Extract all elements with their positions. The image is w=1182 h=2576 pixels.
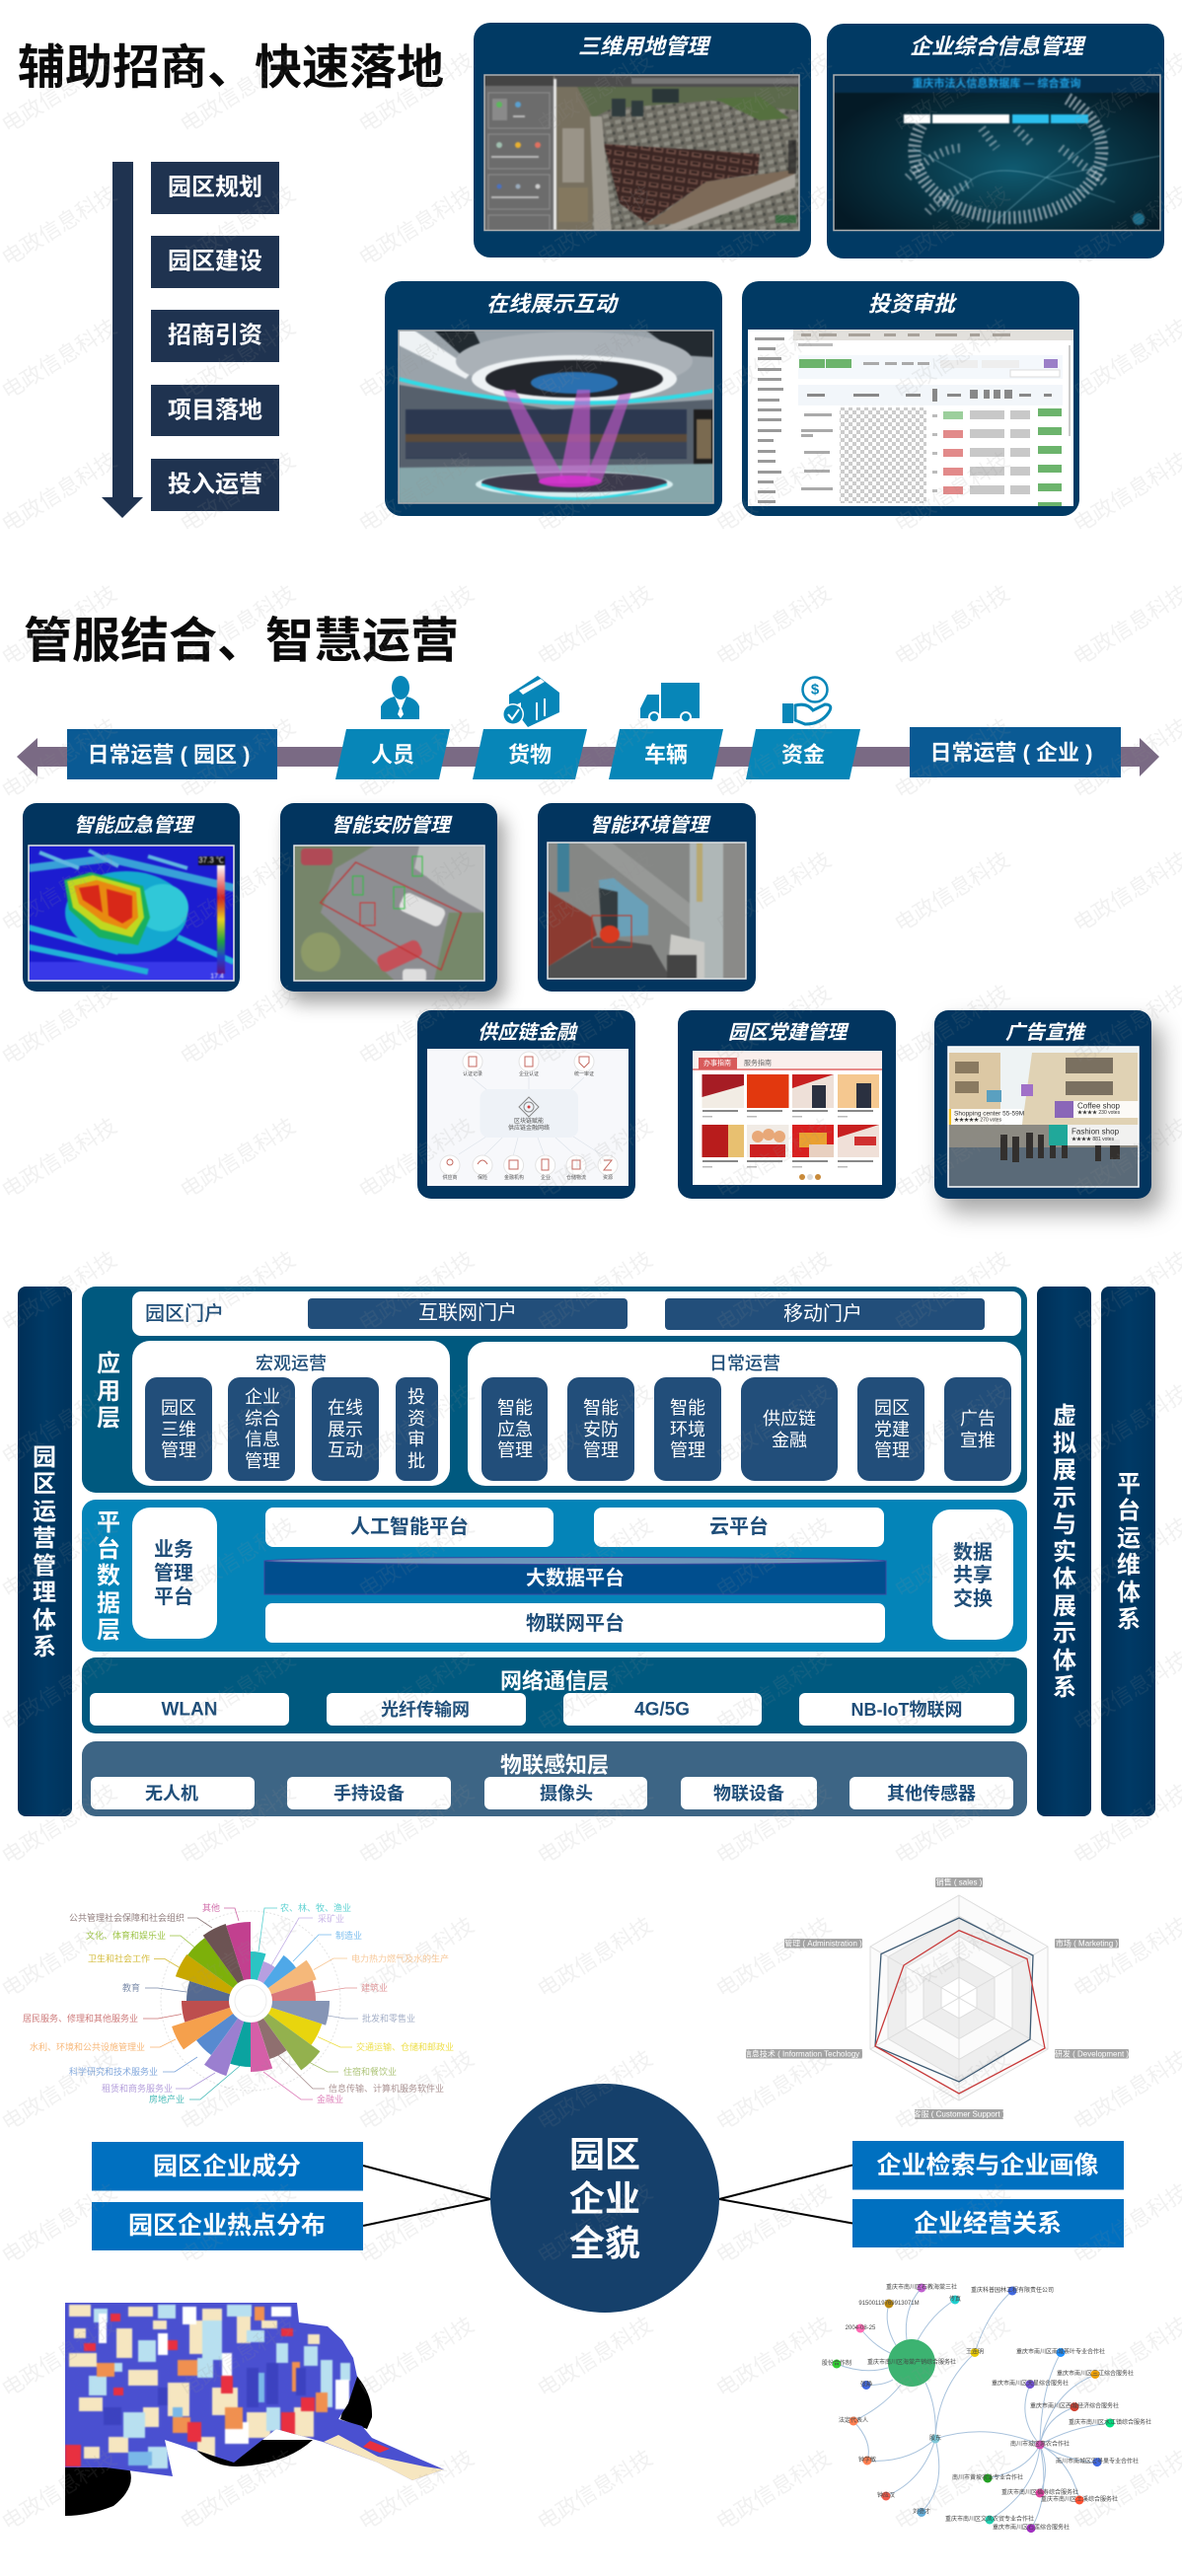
module: 智能环境管理: [654, 1377, 721, 1481]
graph labels: 91500119769913071M: [858, 2301, 920, 2307]
card title: 供应链金融: [478, 1021, 578, 1044]
screenshot: 3D land map: [484, 75, 799, 235]
module: 智能应急管理: [481, 1377, 548, 1481]
box: 物联设备: 物联设备: [713, 1784, 784, 1803]
graph labels: 重庆市南川区海棠产销综合服务社: [867, 2358, 956, 2366]
card title: 在线展示互动: [486, 292, 620, 316]
graph labels: 王连明: [966, 2348, 984, 2356]
box: 光纤传输网: 光纤传输网: [381, 1699, 470, 1720]
label: 园区企业热点分布: 园区企业热点分布: [128, 2212, 326, 2240]
graph labels: 南川市南城区宏寻果专业合作社: [1056, 2458, 1139, 2466]
chart labels: 金融业: [317, 2094, 343, 2104]
panel: 供应链金融: [417, 1010, 635, 1199]
module: 园区三维管理: [145, 1377, 212, 1481]
chart labels: 租赁和商务服务业: [102, 2083, 173, 2094]
module: 园区党建管理: 管理: [874, 1440, 910, 1460]
card title: 广告宣推: [1005, 1021, 1087, 1044]
panel: 园区运营管理体系: 理: [33, 1579, 56, 1606]
step: 招商引资: [151, 310, 279, 362]
chart labels: 文化、体育和娱乐业: [86, 1930, 166, 1941]
image: party building portal: 办事指南: [703, 1058, 731, 1067]
graph labels: 2004-08-25: [846, 2325, 876, 2331]
layer title: 网络通信层: [500, 1669, 609, 1693]
chart labels: 建筑业: [361, 1982, 388, 1993]
chart: enterprise relationship graph: [822, 2283, 1151, 2533]
tag: 货物: 货物: [508, 742, 552, 768]
box: 4G/5G: [563, 1693, 762, 1726]
icon: person: [381, 676, 419, 719]
module: 园区三维管理: 三维: [161, 1420, 196, 1439]
center circle: 园区企业全貌: 全貌: [569, 2222, 640, 2263]
button: 移动门户: [665, 1298, 985, 1330]
panel: 投资审批: [742, 281, 1079, 516]
image: party building portal: [693, 1051, 882, 1185]
image: thermal camera: 37.3 ℃: [198, 856, 224, 864]
block: 业务管理平台: 平台: [154, 1584, 193, 1608]
box: 摄像头: 摄像头: [540, 1783, 593, 1803]
block: 业务管理平台: [132, 1508, 217, 1639]
module: 投资审批: 审: [407, 1430, 425, 1449]
group: 日常运营: 日常运营: [709, 1354, 780, 1373]
panel: 网络通信层: [82, 1657, 1027, 1733]
graph labels: 张静: [860, 2380, 872, 2388]
box: WLAN: WLAN: [162, 1699, 217, 1721]
panel: 园区运营管理体系: 系: [33, 1634, 56, 1659]
center circle: 园区企业全貌: 企业: [569, 2178, 640, 2218]
box: NB-IoT物联网: [799, 1693, 1014, 1726]
graph labels: 重庆市南川区土溪综合服务社: [1041, 2495, 1118, 2503]
module: 在线展示互动: 互动: [328, 1440, 363, 1460]
module: 智能安防管理: [567, 1377, 634, 1481]
chart labels: 农、林、牧、渔业: [280, 1902, 351, 1913]
image: supply chain diagram: 企业认证: [519, 1070, 539, 1077]
image: AR street advertising: Fashion shop: [1071, 1127, 1120, 1137]
group: 宏观运营: [132, 1341, 450, 1486]
graph labels: 重庆市南川区南城茶叶专业合作社: [1016, 2348, 1105, 2356]
graph labels: 传真: [949, 2295, 961, 2303]
graph labels: 重庆市南川区西城经济综合服务社: [1030, 2402, 1119, 2410]
tag: 人员: 人员: [371, 742, 414, 768]
layer label: 台: [97, 1535, 120, 1563]
graph labels: 南川市城区惠农合作社: [1010, 2440, 1070, 2448]
module: 智能安防管理: 安防: [583, 1420, 619, 1439]
box: WLAN: [90, 1693, 289, 1726]
block: 大数据平台: 大数据平台: [526, 1566, 625, 1589]
panel: 平台运维体系: 系: [1117, 1606, 1141, 1632]
module: 投资审批: 批: [407, 1451, 425, 1471]
screenshot: approval table: [748, 330, 1073, 506]
layer label: 平: [97, 1509, 120, 1535]
module: 智能应急管理: 管理: [497, 1440, 533, 1460]
box: 光纤传输网: [327, 1693, 526, 1726]
image: supply chain diagram: 仓储物流: [566, 1174, 586, 1181]
panel: 虚拟展示与实体展示体系: 展: [1053, 1456, 1076, 1484]
block: 数据共享交换: 数据: [953, 1541, 993, 1564]
panel: 虚拟展示与实体展示体系: 示: [1053, 1484, 1076, 1511]
module: 企业综合信息管理: 管理: [245, 1451, 280, 1471]
step: 园区建设: 园区建设: [168, 249, 262, 274]
card title: 投资审批: [868, 292, 958, 316]
button: 移动门户: 移动门户: [783, 1302, 862, 1325]
graph labels: 刘德才: [913, 2508, 930, 2516]
module: 在线展示互动: 展示: [328, 1420, 363, 1439]
chart labels: 采矿业: [318, 1913, 344, 1924]
title: 管服结合、智慧运营: 管服结合、智慧运营: [24, 615, 459, 668]
panel: 虚拟展示与实体展示体系: 系: [1053, 1673, 1076, 1701]
module: 投资审批: 资: [407, 1409, 425, 1429]
tag: 人员: [335, 729, 450, 779]
image: AR street advertising: Shopping center 55-59M: [954, 1111, 1024, 1117]
tag: 货物: [473, 729, 587, 779]
module: 智能安防管理: 管理: [583, 1440, 619, 1460]
panel: 园区运营管理体系: 运: [33, 1498, 56, 1525]
title: 辅助招商、快速落地: 辅助招商、快速落地: [18, 41, 444, 95]
graph labels: [822, 2283, 1151, 2532]
block: 数据共享交换: [932, 1509, 1013, 1640]
module: 广告宣推: 广告: [960, 1409, 996, 1429]
panel: 智能安防管理: [280, 803, 497, 992]
block: 云平台: 云平台: [709, 1514, 769, 1538]
radar label: 管理: 管理 ( Administration ): [784, 1938, 862, 1948]
label: 日常运营（企业）: [910, 727, 1121, 777]
panel: 园区运营管理体系: 体: [33, 1606, 56, 1634]
graph labels: 重庆市南川区石教海棠三社: [886, 2283, 957, 2291]
image: supply chain diagram: 保险: [478, 1174, 487, 1181]
tag: 资金: [746, 729, 860, 779]
block: 业务管理平台: 管理: [154, 1562, 193, 1584]
layer label: 层: [97, 1616, 120, 1644]
icon: cargo box: [502, 676, 559, 727]
image: supply chain diagram: 供应商: [442, 1174, 458, 1181]
image: supply chain diagram: 认证记录: [463, 1070, 482, 1077]
module: 智能应急管理: 应急: [497, 1420, 533, 1439]
module: 供应链金融: 供应链: [763, 1409, 816, 1429]
graph labels: 重庆市南川区天星综合服务社: [992, 2380, 1069, 2388]
radar label: 研发: 研发 ( Development ): [1055, 2048, 1129, 2058]
panel: 园区运营管理体系: 营: [33, 1525, 56, 1551]
portal row: [132, 1291, 1021, 1336]
graph labels: 重庆市南川区水江镇综合服务社: [1069, 2418, 1151, 2426]
layer label: 应: [97, 1350, 120, 1377]
image: thermal camera: 17.4: [210, 973, 224, 981]
step: 投入运营: [151, 459, 279, 511]
panel: 平台运维体系: 台: [1117, 1496, 1141, 1523]
chart: radar: [744, 1877, 1129, 2119]
panel: 虚拟展示与实体展示体系: 示: [1053, 1620, 1076, 1646]
panel: 虚拟展示与实体展示体系: 实: [1053, 1539, 1076, 1565]
chart: industry rose chart: [23, 1902, 454, 2104]
panel: 物联感知层: [82, 1741, 1027, 1816]
panel: 三维用地管理: [474, 23, 811, 258]
image: security camera: [294, 846, 484, 983]
panel: 企业综合信息管理: [827, 24, 1164, 258]
block: 人工智能平台: [265, 1508, 554, 1547]
label: 日常运营（园区）: [67, 729, 277, 779]
block: 云平台: [594, 1508, 884, 1547]
label: 园区企业成分: 园区企业成分: [153, 2153, 301, 2180]
step: 项目落地: 项目落地: [168, 397, 262, 424]
block: 物联网平台: 物联网平台: [526, 1611, 625, 1635]
panel: 虚拟展示与实体展示体系: 虚: [1053, 1403, 1076, 1429]
block: 数据共享交换: 共享: [953, 1564, 993, 1586]
screenshot: enterprise database: 重庆市法人信息数据库 — 综合查询: [912, 76, 1081, 90]
panel: 应用层: [82, 1287, 1027, 1493]
step: 投入运营: 投入运营: [168, 472, 262, 497]
radar label: 信息技术: 信息技术 ( Information Techology ): [744, 2048, 864, 2058]
box: 无人机: 无人机: [145, 1784, 198, 1803]
step: 项目落地: [151, 385, 279, 436]
module: 智能环境管理: 管理: [670, 1440, 705, 1460]
label: 日常运营（园区）: 日常运营 ( 园区 ): [87, 742, 251, 768]
module: 园区三维管理: 管理: [161, 1440, 196, 1460]
layer label: 层: [97, 1405, 120, 1431]
button: 互联网门户: 互联网门户: [418, 1301, 517, 1324]
step: 园区规划: [151, 162, 279, 214]
portal row: 园区门户: [145, 1302, 224, 1325]
module: 园区党建管理: 园区: [874, 1398, 910, 1418]
module: 广告宣推: 宣推: [960, 1431, 996, 1450]
module: 园区三维管理: 园区: [161, 1398, 196, 1418]
module: 企业综合信息管理: 企业: [245, 1387, 280, 1407]
graph labels: 法定代表人: [839, 2416, 868, 2424]
box: 摄像头: [484, 1777, 647, 1809]
chart labels: 其他: [202, 1902, 220, 1913]
chart labels: 交通运输、仓储和邮政业: [356, 2041, 454, 2052]
panel: 虚拟展示与实体展示体系: [1037, 1287, 1091, 1816]
panel: 平台运维体系: 平: [1117, 1470, 1141, 1498]
module: 投资审批: [396, 1377, 438, 1481]
panel: 虚拟展示与实体展示体系: 体: [1053, 1565, 1076, 1592]
panel: 智能应急管理: [23, 803, 240, 992]
chart labels: [23, 1902, 454, 2104]
image: AR street advertising: ★★★★ 881 votes: [1071, 1137, 1115, 1142]
module: 智能环境管理: 环境: [670, 1420, 705, 1439]
panel: 智能环境管理: [538, 803, 756, 992]
panel: 园区党建管理: [678, 1010, 896, 1199]
chart labels: 教育: [122, 1982, 140, 1993]
panel: 虚拟展示与实体展示体系: 与: [1053, 1511, 1076, 1537]
step list: [151, 162, 279, 511]
connector lines: [363, 2165, 852, 2226]
tag: 车辆: 车辆: [644, 742, 688, 768]
image: supply chain diagram: 统一审证: [574, 1070, 594, 1077]
chart labels: 居民服务、修理和其他服务业: [23, 2013, 138, 2024]
screenshot: enterprise database: [834, 75, 1160, 231]
label: 企业检索与企业画像: [852, 2141, 1124, 2190]
module: 供应链金融: [741, 1377, 838, 1481]
chart labels: 公共管理社会保障和社会组织: [69, 1912, 185, 1923]
panel: 园区运营管理体系: 园: [33, 1444, 56, 1470]
radar label: 客服: 客服 ( Customer Support ): [914, 2109, 1005, 2119]
panel: 平台运维体系: 体: [1117, 1579, 1141, 1606]
graph labels: 股东: [929, 2434, 941, 2442]
graph labels: 重庆科普园林工程有限责任公司: [971, 2286, 1054, 2294]
tag: 资金: 资金: [781, 742, 825, 768]
center circle: 园区企业全貌: 园区: [569, 2133, 640, 2174]
step: 园区建设: [151, 236, 279, 288]
graph labels: 股份合作制: [822, 2359, 851, 2367]
panel: 广告宣推: [934, 1010, 1151, 1199]
panel: 在线展示互动: [385, 281, 722, 516]
block: 物联网平台: [265, 1603, 885, 1643]
card title: 企业综合信息管理: [910, 34, 1086, 59]
label: 企业经营关系: [852, 2199, 1124, 2247]
panel: 园区运营管理体系: 管: [33, 1553, 56, 1579]
label: 园区企业成分: [92, 2142, 363, 2190]
image: supply chain diagram: 资源: [603, 1174, 613, 1181]
block: 业务管理平台: 业务: [154, 1538, 193, 1561]
module: 园区党建管理: 党建: [874, 1420, 910, 1439]
graph labels: 钟应汉: [877, 2491, 895, 2499]
arrow: process flow: [102, 162, 143, 518]
panel: 园区运营管理体系: 区: [33, 1470, 56, 1498]
tag: 车辆: [609, 729, 723, 779]
image: AR street advertising: ★★★★ 230 votes: [1077, 1110, 1121, 1116]
chart labels: 科学研究和技术服务业: [69, 2066, 158, 2077]
box: 4G/5G: 4G/5G: [634, 1699, 690, 1721]
graph labels: 重庆市南川区石莲综合服务社: [993, 2524, 1070, 2532]
module: 供应链金融: 金融: [772, 1431, 807, 1450]
chart labels: 制造业: [335, 1930, 362, 1941]
card title: 园区党建管理: [728, 1021, 850, 1044]
module: 在线展示互动: [312, 1377, 379, 1481]
image: AR street advertising: ★★★★★ 270 votes: [954, 1117, 1002, 1123]
graph labels: 重庆市南川区文凤农贸专业合作社: [945, 2515, 1034, 2523]
screenshot: virtual studio: [399, 331, 713, 503]
map: enterprise hotspot 3D heat map: [65, 2303, 444, 2516]
module: 企业综合信息管理: [228, 1377, 295, 1481]
graph labels: 重庆市南川区福寿综合服务社: [1001, 2488, 1078, 2496]
panel: 平台数据层: [82, 1500, 1027, 1652]
layer label: 据: [97, 1590, 120, 1616]
chart labels: 水利、环境和公共设施管理业: [30, 2041, 145, 2052]
group: 宏观运营: 宏观运营: [256, 1354, 327, 1373]
layer label: 数: [97, 1563, 120, 1588]
box: 手持设备: 手持设备: [333, 1784, 405, 1803]
chart labels: 住宿和餐饮业: [343, 2066, 397, 2077]
panel: 平台运维体系: [1101, 1287, 1155, 1816]
graph labels: 重庆市南川区三江综合服务社: [1057, 2370, 1134, 2378]
radar label: 市场: 市场 ( Marketing ): [1056, 1938, 1118, 1948]
box: 手持设备: [287, 1777, 451, 1809]
module: 园区党建管理: [857, 1377, 924, 1481]
block: 人工智能平台: 人工智能平台: [350, 1514, 469, 1538]
label: 日常运营（企业）: 日常运营 ( 企业 ): [929, 740, 1093, 766]
image: supply chain diagram: [427, 1049, 628, 1186]
block: 大数据平台: [264, 1557, 886, 1594]
card title: 三维用地管理: [578, 34, 711, 59]
icon: money in hand: [782, 677, 831, 724]
layer title: 物联感知层: [500, 1752, 609, 1778]
icon: money in hand: $: [811, 681, 820, 699]
chart labels: 房地产业: [149, 2094, 185, 2104]
box: NB-IoT物联网: NB-IoT物联网: [851, 1700, 962, 1720]
radar label: 销售: 销售 ( sales ): [936, 1877, 983, 1886]
module: 在线展示互动: 在线: [328, 1398, 363, 1418]
chart labels: 批发和零售业: [362, 2013, 415, 2024]
layer label: 用: [97, 1377, 120, 1405]
arrow: double-headed operations bar: [17, 738, 1159, 776]
box: 其他传感器: 其他传感器: [887, 1784, 976, 1803]
image: environment camera: [548, 843, 746, 979]
step: 招商引资: 招商引资: [168, 322, 262, 349]
graph labels: 钟学敏: [858, 2456, 876, 2464]
panel: 园区运营管理体系: [18, 1287, 72, 1816]
image: supply chain diagram: 金融机构: [504, 1174, 524, 1181]
box: 其他传感器: [850, 1777, 1013, 1809]
group: 日常运营: [468, 1342, 1021, 1486]
module: 投资审批: 投: [407, 1387, 425, 1407]
label: 园区企业热点分布: [92, 2202, 363, 2250]
panel: 虚拟展示与实体展示体系: 拟: [1053, 1431, 1076, 1456]
module: 智能应急管理: 智能: [497, 1398, 533, 1418]
image: supply chain diagram: 区块链赋能: [514, 1117, 544, 1125]
step: 园区规划: 园区规划: [168, 174, 262, 201]
image: party building portal: 服务指南: [744, 1058, 772, 1067]
module: 智能安防管理: 智能: [583, 1398, 619, 1418]
chart labels: 电力热力燃气及水的生产: [351, 1953, 449, 1963]
label: 企业经营关系: 企业经营关系: [914, 2210, 1062, 2238]
card title: 智能环境管理: [590, 814, 711, 837]
chart labels: 卫生和社会工作: [88, 1953, 150, 1963]
block: 数据共享交换: 交换: [953, 1586, 993, 1610]
image: AR street advertising: [948, 1047, 1139, 1187]
module: 企业综合信息管理: 信息: [245, 1430, 280, 1449]
panel: 虚拟展示与实体展示体系: 展: [1053, 1592, 1076, 1620]
module: 智能环境管理: 智能: [670, 1398, 705, 1418]
image: thermal camera: [29, 846, 234, 981]
module: 企业综合信息管理: 综合: [245, 1409, 280, 1429]
image: AR street advertising: Coffee shop: [1077, 1101, 1121, 1111]
image: supply chain diagram: 企业: [541, 1174, 551, 1181]
module: 广告宣推: [944, 1377, 1011, 1481]
graph labels: 南川市黄坡农业专业合作社: [952, 2473, 1023, 2481]
button: 互联网门户: [308, 1298, 628, 1329]
card title: 智能安防管理: [332, 814, 453, 837]
card title: 智能应急管理: [74, 814, 195, 837]
label: 企业检索与企业画像: 企业检索与企业画像: [876, 2152, 1099, 2179]
box: 物联设备: [681, 1777, 817, 1809]
icon: truck: [640, 683, 700, 723]
image: supply chain diagram: 供应链金融网络: [508, 1124, 550, 1132]
box: 无人机: [91, 1777, 255, 1809]
center circle: 园区企业全貌: [490, 2084, 719, 2313]
panel: 平台运维体系: 维: [1117, 1551, 1141, 1579]
chart labels: 信息传输、计算机服务软件业: [329, 2083, 444, 2094]
panel: 虚拟展示与实体展示体系: 体: [1053, 1648, 1076, 1673]
panel: 平台运维体系: 运: [1117, 1525, 1141, 1551]
